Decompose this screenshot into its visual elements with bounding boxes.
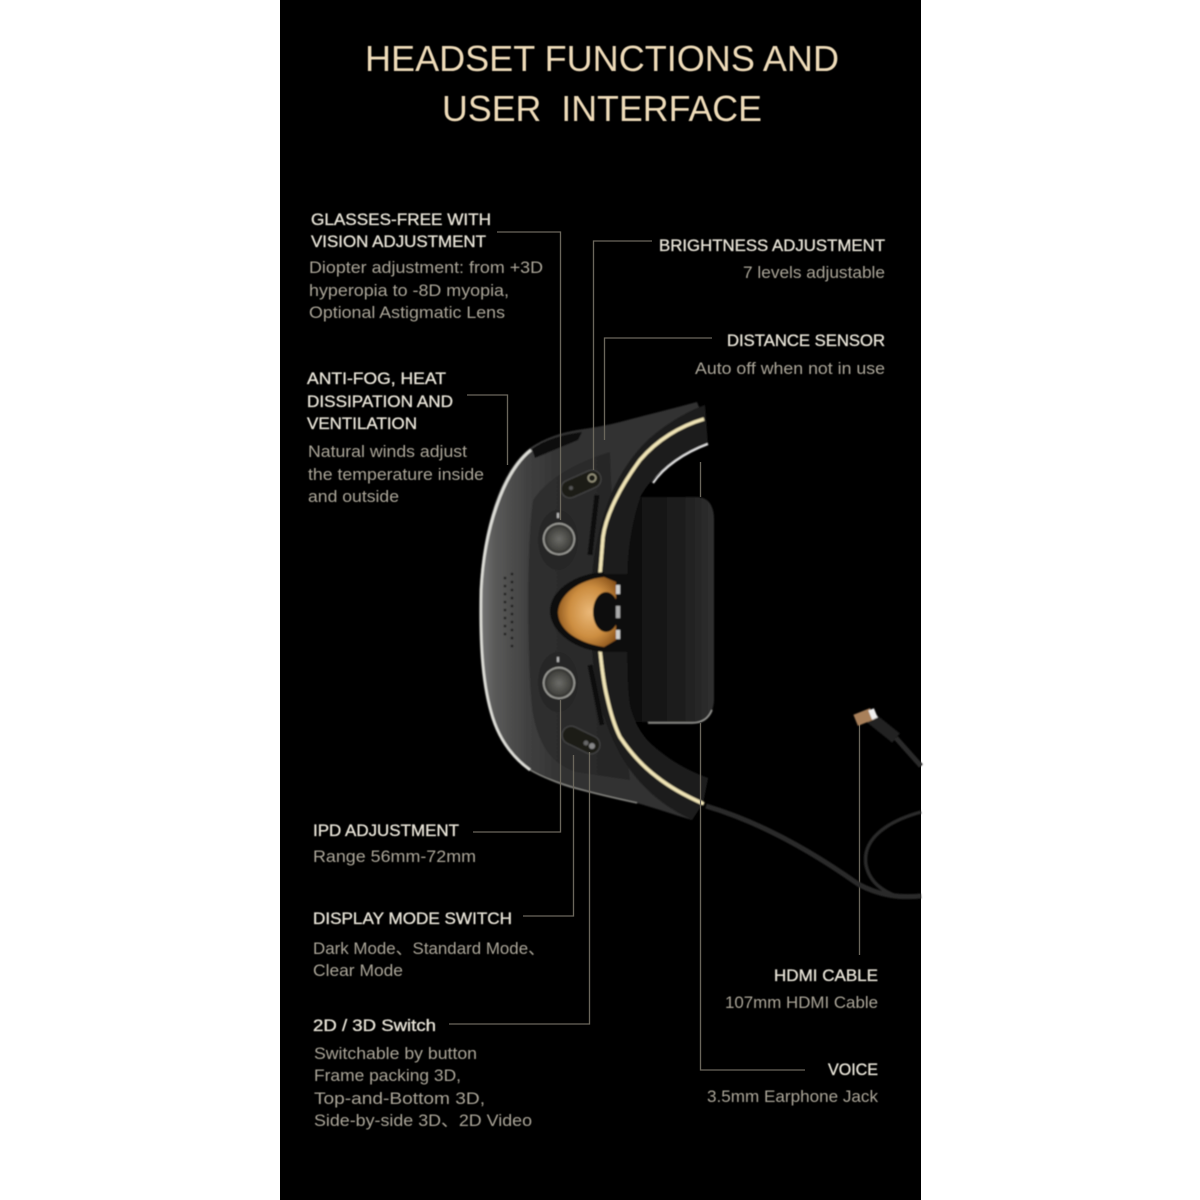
- label: brightness: 7 levels adjustable: [743, 264, 885, 282]
- label: 2D/3D switch: Switchable by button: [314, 1045, 477, 1063]
- label: anti-fog: [307, 369, 484, 506]
- label: HDMI cable: [725, 966, 878, 1012]
- icon: top button: [558, 467, 604, 501]
- icon: bottom button: [559, 723, 603, 757]
- title: HEADSET FUNCTIONS AND: [365, 38, 839, 79]
- label: glasses-free: GLASSES-FREE WITH: [311, 210, 491, 229]
- label: distance sensor: Auto off when not in use: [695, 360, 885, 378]
- label: brightness: BRIGHTNESS ADJUSTMENT: [659, 236, 885, 255]
- label: glasses-free: hyperopia to -8D myopia,: [309, 282, 509, 300]
- label: 2D/3D switch: [313, 1016, 532, 1130]
- title: [365, 38, 839, 129]
- label: voice: 3.5mm Earphone Jack: [707, 1088, 879, 1106]
- label: 2D/3D switch: Frame packing 3D,: [314, 1067, 461, 1085]
- label: 2D/3D switch: Top-and-Bottom 3D,: [314, 1090, 485, 1108]
- illustration: HDMI cable: [706, 708, 921, 897]
- label: IPD adjustment: IPD ADJUSTMENT: [313, 821, 459, 840]
- label: distance sensor: DISTANCE SENSOR: [727, 331, 885, 350]
- label: glasses-free: VISION ADJUSTMENT: [311, 232, 486, 251]
- label: glasses-free: Optional Astigmatic Lens: [309, 304, 505, 322]
- label: anti-fog: VENTILATION: [307, 414, 417, 433]
- icon: connector: [853, 708, 878, 726]
- background panel: [280, 0, 921, 1200]
- icon: lower dial: [538, 652, 578, 712]
- label: glasses-free: Diopter adjustment: from +3D: [309, 259, 543, 277]
- label: voice: [707, 1060, 879, 1106]
- label: distance sensor: [695, 331, 885, 378]
- illustration: VR headset: [480, 402, 714, 820]
- label: brightness: [659, 236, 885, 282]
- label: anti-fog: Natural winds adjust: [308, 443, 467, 461]
- labels: right column: [659, 236, 885, 1106]
- label: anti-fog: DISSIPATION AND: [307, 392, 453, 411]
- label: anti-fog: ANTI-FOG, HEAT: [307, 369, 446, 388]
- icon: upper dial: [538, 510, 578, 570]
- label: anti-fog: the temperature inside: [308, 466, 484, 484]
- leader lines: [449, 232, 860, 1070]
- icon: gold nose bridge: [550, 572, 620, 652]
- top dark wedge: [532, 432, 582, 458]
- speaker grille: [504, 573, 513, 647]
- face pad: [625, 497, 714, 722]
- label: 2D/3D switch: 2D / 3D Switch: [313, 1016, 436, 1035]
- dark inner panel: [528, 452, 630, 780]
- dark band behind gold line: [592, 405, 708, 577]
- label: 2D/3D switch: Side-by-side 3D、2D Video: [314, 1112, 532, 1130]
- label: display mode switch: DISPLAY MODE SWITCH: [313, 909, 512, 928]
- label: voice: VOICE: [828, 1060, 878, 1079]
- label: display mode switch: Dark Mode、Standard Mode、: [313, 940, 545, 958]
- dark gap beside nose bridge: [604, 574, 630, 652]
- label: IPD adjustment: Range 56mm-72mm: [313, 848, 476, 866]
- labels: left column: [307, 210, 545, 1130]
- label: anti-fog: and outside: [308, 488, 399, 506]
- label: display mode switch: [313, 909, 545, 980]
- headset shell: [480, 402, 708, 820]
- vents: [590, 495, 602, 725]
- label: IPD adjustment: [313, 821, 476, 866]
- label: HDMI cable: HDMI CABLE: [774, 966, 878, 985]
- gold trim line: [600, 419, 704, 574]
- title: USER INTERFACE: [442, 88, 762, 129]
- label: HDMI cable: 107mm HDMI Cable: [725, 994, 878, 1012]
- label: display mode switch: Clear Mode: [313, 962, 403, 980]
- white rim highlights: [481, 450, 531, 770]
- label: glasses-free: [309, 210, 543, 322]
